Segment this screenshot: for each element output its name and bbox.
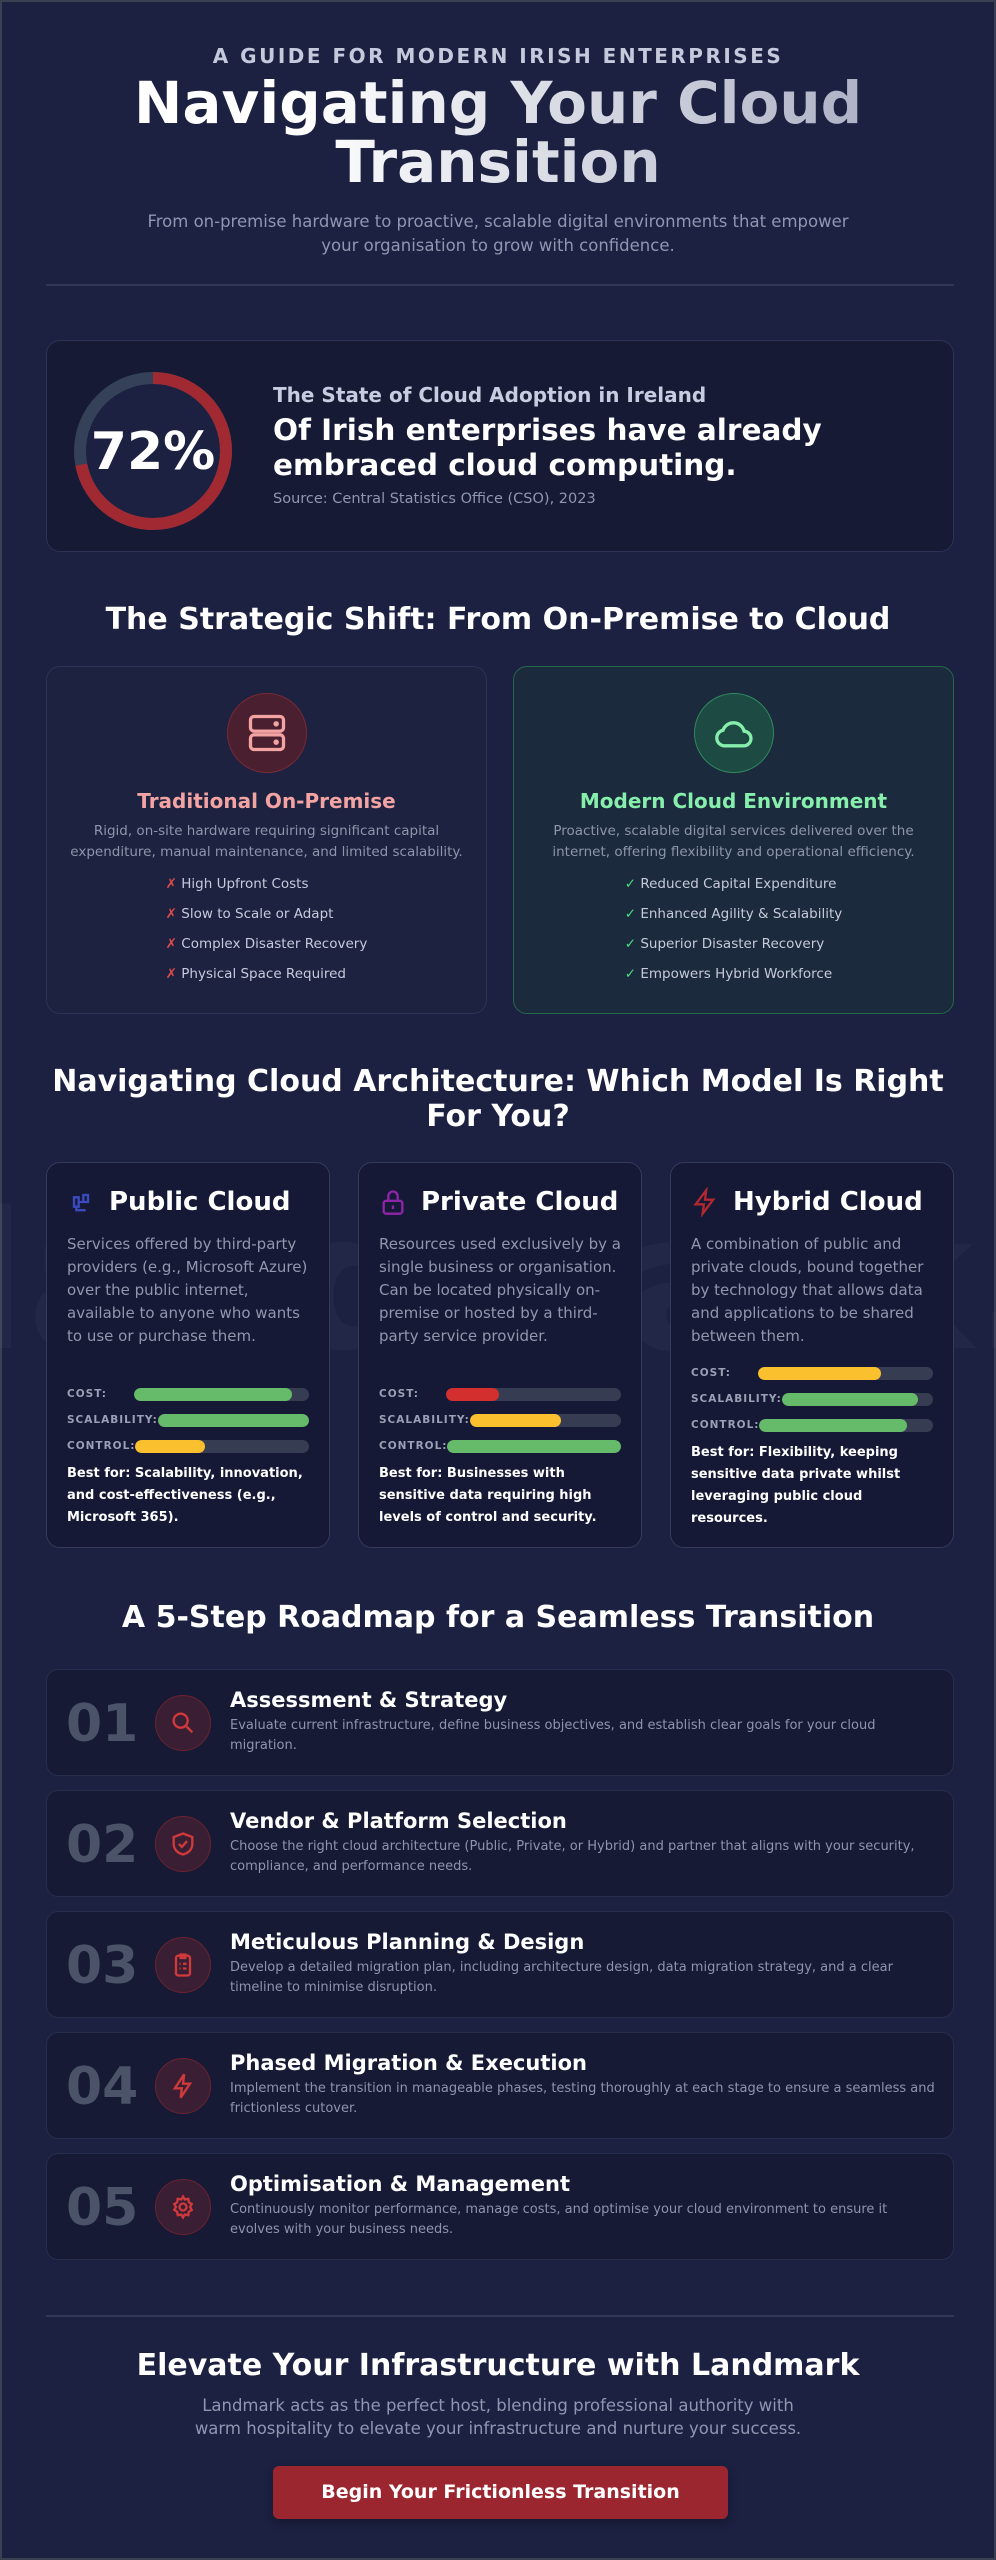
panel: public cloud: CONTROL: [67, 1440, 135, 1452]
heading: roadmap: A 5-Step Roadmap for a Seamless Transition [122, 1600, 874, 1635]
tagline: your organisation to grow with confidence. [321, 236, 675, 255]
panel: public cloud: Best for: Scalability, innovation, and cost-effectiveness (e.g., Microsoft 365). [67, 1466, 303, 1525]
panel: stats [46, 340, 954, 552]
tagline: From on-premise hardware to proactive, scalable digital environments that empower [147, 212, 849, 231]
heading: architecture: Navigating Cloud Architecture: Which Model Is Right [52, 1064, 944, 1099]
step 4: 04 [66, 2057, 138, 2117]
panel: modern cloud: ✓ Superior Disaster Recovery [625, 936, 824, 952]
panel: private cloud: Resources used exclusively by a single business or organisation. Can be located physically on-premise or hosted by a third-party service provider. [379, 1235, 621, 1345]
icon: server [226, 693, 306, 773]
stats text [273, 383, 822, 507]
panel: modern cloud: Proactive, scalable digital services delivered over the internet, offering flexibility and operational efficiency. [552, 823, 915, 860]
cta button [273, 2466, 728, 2519]
heading: architecture: For You? [426, 1099, 570, 1134]
chart: donut 72% [74, 372, 232, 530]
panel: traditional on-premise: ✗ Physical Space Required [166, 966, 346, 982]
panel: modern cloud: ✓ Reduced Capital Expenditure [625, 876, 836, 892]
panel: hybrid cloud: CONTROL: [691, 1419, 759, 1431]
panel: private cloud: CONTROL: [379, 1440, 447, 1452]
step 2 [46, 1790, 954, 1897]
panel: public cloud: COST: [67, 1388, 107, 1400]
cta text [195, 2396, 801, 2438]
step 1: Assessment & Strategy [230, 1688, 507, 1712]
panel: traditional on-premise: Traditional On-Premise [137, 789, 396, 813]
panel: public cloud: SCALABILITY: [67, 1414, 158, 1426]
step 2: Choose the right cloud architecture (Public, Private, or Hybrid) and partner that aligns with your security, compliance, and performance needs. [230, 1839, 915, 1874]
panel: private cloud: COST: [379, 1388, 419, 1400]
step 3: Develop a detailed migration plan, including architecture design, data migration strategy, and a clear timeline to minimise disruption. [230, 1960, 893, 1995]
step 1: Evaluate current infrastructure, define business objectives, and establish clear goals for your cloud migration. [230, 1718, 875, 1753]
title [2, 74, 994, 192]
step 4 [46, 2032, 954, 2139]
stats text: The State of Cloud Adoption in Ireland [273, 383, 706, 407]
chart: donut 72%: 72% [91, 422, 215, 482]
cta button: Begin Your Frictionless Transition [321, 2481, 680, 2503]
step 5: Optimisation & Management [230, 2172, 570, 2196]
panel: private cloud [358, 1162, 642, 1548]
panel: hybrid cloud: COST: [691, 1367, 731, 1379]
icon: cloud [694, 693, 774, 773]
step 5: 05 [66, 2178, 138, 2238]
panel: public cloud: Services offered by third-party providers (e.g., Microsoft Azure) over the public internet, available to anyone who wants to use or purchase them. [67, 1235, 307, 1345]
heading: strategic shift: The Strategic Shift: From On-Premise to Cloud [106, 602, 890, 637]
step 4: Phased Migration & Execution [230, 2051, 587, 2075]
step 2: 02 [66, 1815, 138, 1875]
stats text: Of Irish enterprises have already [273, 413, 822, 447]
panel: modern cloud: Modern Cloud Environment [580, 789, 887, 813]
cta heading: Elevate Your Infrastructure with Landmark [137, 2348, 859, 2383]
panel: modern cloud [513, 666, 954, 1014]
panel: public cloud [46, 1162, 330, 1548]
step 5 [46, 2153, 954, 2260]
heading: architecture [52, 1064, 944, 1134]
panel: private cloud: SCALABILITY: [379, 1414, 470, 1426]
step 5: Continuously monitor performance, manage costs, and optimise your cloud environment to ensure it evolves with your business needs. [230, 2202, 887, 2237]
cta text: warm hospitality to elevate your infrastructure and nurture your success. [195, 2419, 801, 2438]
panel: modern cloud: ✓ Empowers Hybrid Workforce [625, 966, 832, 982]
step 1: 01 [66, 1694, 138, 1754]
panel: hybrid cloud: SCALABILITY: [691, 1393, 782, 1405]
tagline [147, 212, 849, 255]
step 3: Meticulous Planning & Design [230, 1930, 584, 1954]
panel: private cloud: Private Cloud [421, 1187, 618, 1217]
header kicker: A GUIDE FOR MODERN IRISH ENTERPRISES [213, 44, 783, 68]
cta text: Landmark acts as the perfect host, blending professional authority with [202, 2396, 794, 2415]
panel: hybrid cloud: A combination of public and private clouds, bound together by technology that allows data and applications to be shared between them. [691, 1235, 923, 1345]
panel: hybrid cloud [670, 1162, 954, 1548]
title: Transition [335, 128, 661, 196]
panel: traditional on-premise: ✗ High Upfront Costs [166, 876, 308, 892]
panel: modern cloud: ✓ Enhanced Agility & Scalability [625, 906, 842, 922]
step 4: Implement the transition in manageable phases, testing thoroughly at each stage to ensure a seamless and frictionless cutover. [230, 2081, 935, 2116]
title: Navigating Your Cloud [134, 69, 862, 137]
panel: traditional on-premise: ✗ Complex Disaster Recovery [166, 936, 367, 952]
step 3: 03 [66, 1936, 138, 1996]
panel: traditional on-premise: Rigid, on-site hardware requiring significant capital expenditure, manual maintenance, and limited scalability. [70, 823, 463, 860]
panel: hybrid cloud: Best for: Flexibility, keeping sensitive data private whilst leveraging public cloud resources. [691, 1445, 900, 1526]
panel: private cloud: Best for: Businesses with sensitive data requiring high levels of control and security. [379, 1466, 597, 1525]
panel: hybrid cloud: Hybrid Cloud [733, 1187, 923, 1217]
stats text: Source: Central Statistics Office (CSO), 2023 [273, 491, 596, 507]
panel: public cloud: Public Cloud [109, 1187, 290, 1217]
step 3 [46, 1911, 954, 2018]
panel: traditional on-premise [46, 666, 487, 1014]
step 2: Vendor & Platform Selection [230, 1809, 567, 1833]
stats text: embraced cloud computing. [273, 448, 737, 482]
panel: traditional on-premise: ✗ Slow to Scale or Adapt [166, 906, 333, 922]
step 1 [46, 1669, 954, 1776]
